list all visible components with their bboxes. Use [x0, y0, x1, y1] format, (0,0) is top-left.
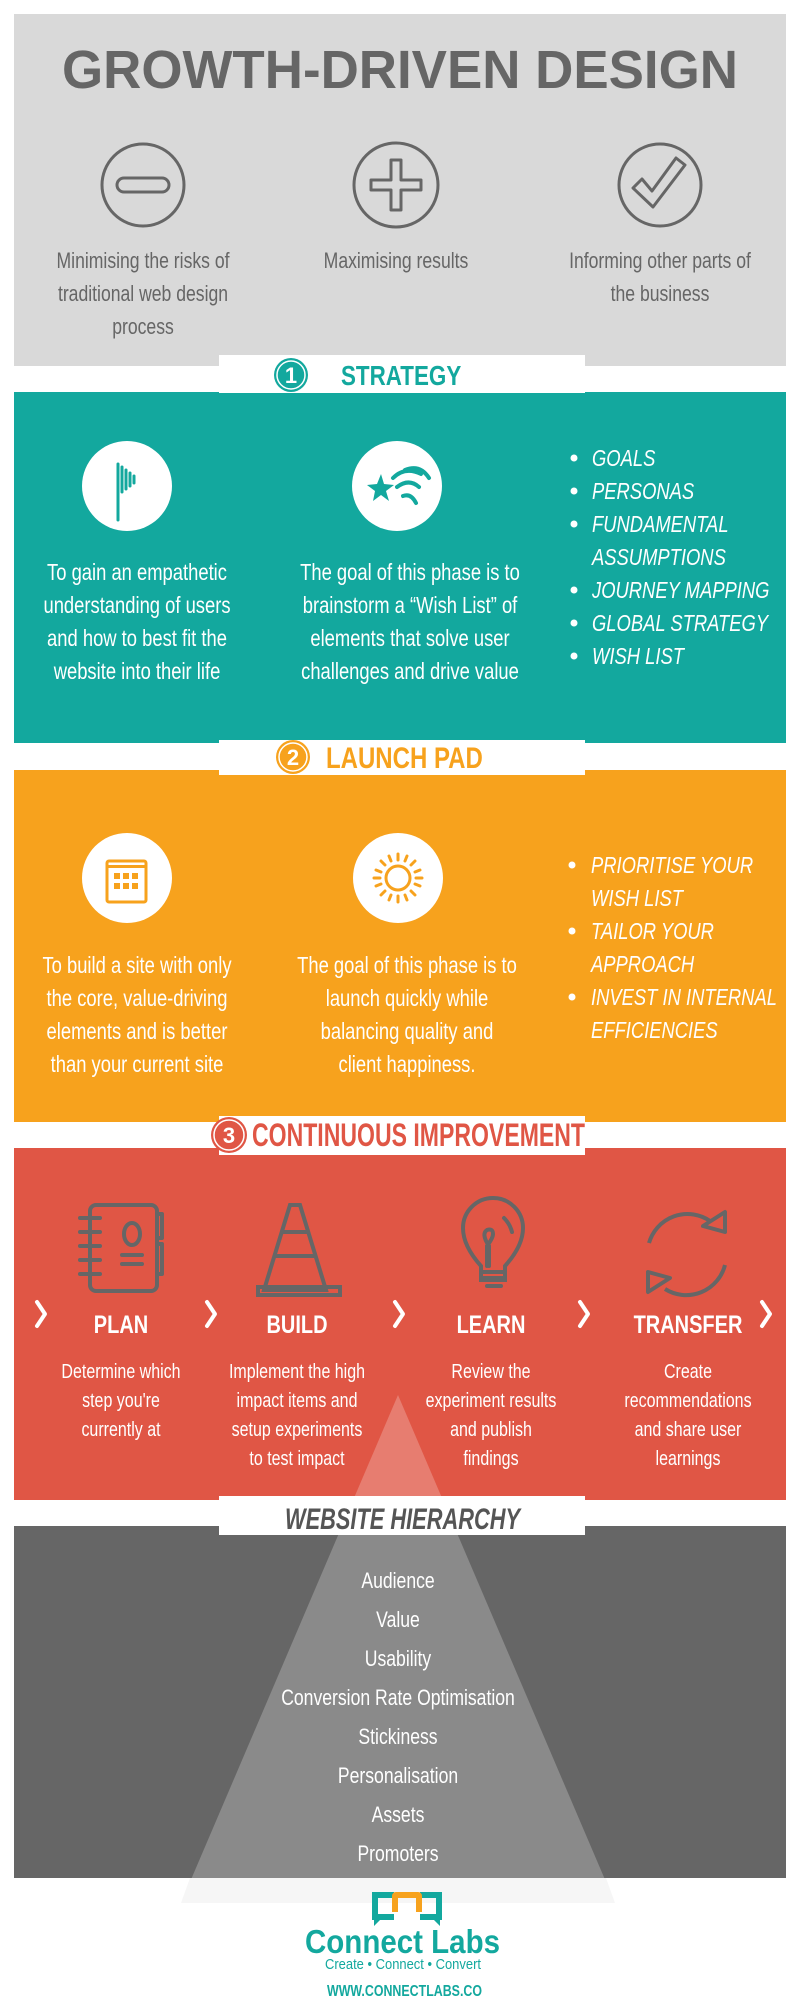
list: launch pad: WISH LIST	[591, 886, 684, 912]
text: launch left: To build a site with only	[42, 953, 232, 979]
heading: build: BUILD	[266, 1311, 328, 1339]
chevrons	[37, 1302, 770, 1326]
text: strategy left: website into their life	[53, 659, 220, 685]
panel: website hierarchy	[14, 1526, 786, 1878]
text: transfer	[624, 1360, 752, 1469]
text: launch middle: The goal of this phase is to	[297, 953, 517, 979]
heading: continuous improvement	[211, 1116, 585, 1155]
heading: strategy: 1	[285, 363, 297, 388]
hierarchy list: Conversion Rate Optimisation	[281, 1686, 515, 1711]
text: strategy left: To gain an empathetic	[47, 560, 227, 586]
icon: cone	[258, 1205, 340, 1295]
text: launch middle: balancing quality and	[321, 1019, 493, 1045]
text: learn: and publish	[450, 1418, 532, 1440]
text: launch left: the core, value-driving	[47, 986, 227, 1012]
text: transfer: Create	[664, 1360, 712, 1382]
text: strategy left	[43, 560, 231, 685]
text: launch middle: client happiness.	[339, 1052, 475, 1078]
text: plan: Determine which	[61, 1360, 181, 1382]
list: strategy: GLOBAL STRATEGY	[592, 611, 770, 637]
logo: connect labs	[305, 1892, 500, 2000]
logo: connect labs: WWW.CONNECTLABS.CO	[327, 1983, 482, 2000]
text: strategy middle: elements that solve user	[310, 626, 510, 652]
text: strategy middle: The goal of this phase is to	[300, 560, 520, 586]
text: learn	[426, 1360, 556, 1469]
text: strategy left: and how to best fit the	[47, 626, 227, 652]
icon: cycle arrows	[648, 1212, 725, 1295]
list: launch pad: EFFICIENCIES	[591, 1018, 718, 1044]
list: strategy: ASSUMPTIONS	[590, 545, 726, 571]
text: minimising	[57, 249, 230, 340]
text: informing: the business	[611, 282, 709, 307]
text: transfer: learnings	[656, 1447, 720, 1469]
icon: sun	[353, 833, 443, 923]
text: build: to test impact	[249, 1447, 345, 1469]
text: strategy middle	[300, 560, 520, 685]
text: launch left: than your current site	[51, 1052, 223, 1078]
list: launch pad: TAILOR YOUR	[591, 919, 714, 945]
pyramid	[181, 1395, 615, 1903]
icon: check	[619, 144, 701, 226]
heading: strategy: STRATEGY	[341, 361, 461, 392]
icon: calendar	[82, 833, 172, 923]
text: launch left	[42, 953, 232, 1078]
icon: flag	[82, 441, 172, 531]
text: informing: Informing other parts of	[569, 249, 751, 274]
heading: continuous improvement: 3	[223, 1123, 235, 1148]
hierarchy list: Assets	[372, 1803, 424, 1828]
list: strategy: PERSONAS	[592, 479, 694, 505]
list: launch pad: INVEST IN INTERNAL	[591, 985, 777, 1011]
text: learn: experiment results	[426, 1389, 556, 1411]
panel: strategy	[14, 392, 786, 743]
heading: strategy	[219, 355, 585, 393]
text: strategy middle: brainstorm a “Wish List” of	[303, 593, 517, 619]
heading: plan: PLAN	[94, 1311, 148, 1339]
text: minimising: traditional web design	[58, 282, 228, 307]
panel: launch pad	[14, 770, 786, 1122]
text: launch left: elements and is better	[47, 1019, 228, 1045]
text: launch middle: launch quickly while	[326, 986, 488, 1012]
logo: connect labs: Connect Labs	[305, 1923, 500, 1960]
heading: learn: LEARN	[457, 1311, 525, 1339]
text: build: setup experiments	[232, 1418, 362, 1440]
list: launch pad: APPROACH	[589, 952, 695, 978]
heading: launch pad: 2	[287, 745, 299, 770]
list: strategy: WISH LIST	[592, 644, 685, 670]
heading: launch pad	[219, 740, 585, 775]
text: maximising: Maximising results	[324, 249, 468, 274]
icon: plus	[354, 143, 438, 227]
text: transfer: and share user	[635, 1418, 741, 1440]
icon: minus	[102, 144, 184, 226]
text: build: impact items and	[237, 1389, 357, 1411]
list: strategy: JOURNEY MAPPING	[591, 578, 769, 604]
list: strategy	[570, 446, 770, 670]
icon: shooting star	[352, 441, 442, 531]
text: plan	[61, 1360, 181, 1440]
text: strategy middle: challenges and drive value	[301, 659, 519, 685]
hierarchy list	[281, 1569, 515, 1867]
text: build	[229, 1360, 365, 1469]
text: launch middle	[297, 953, 517, 1078]
text: learn: Review the	[451, 1360, 531, 1382]
title: GROWTH-DRIVEN DESIGN	[62, 40, 738, 100]
hierarchy list: Stickiness	[358, 1725, 438, 1750]
text: plan: currently at	[81, 1418, 161, 1440]
icon: logo bubbles	[372, 1892, 442, 1926]
heading: transfer: TRANSFER	[634, 1311, 742, 1339]
hierarchy list: Value	[376, 1608, 420, 1633]
list: launch pad	[568, 853, 777, 1044]
logo: connect labs: Create • Connect • Convert	[325, 1956, 482, 1973]
heading: website hierarchy	[219, 1496, 585, 1536]
icon: bulb	[463, 1198, 523, 1286]
list: launch pad: PRIORITISE YOUR	[591, 853, 753, 879]
list: strategy: GOALS	[592, 446, 655, 472]
hierarchy list: Audience	[361, 1569, 435, 1594]
text: strategy left: understanding of users	[43, 593, 231, 619]
text: minimising: Minimising the risks of	[57, 249, 230, 274]
icon: notebook	[80, 1205, 162, 1291]
text: build: Implement the high	[229, 1360, 365, 1382]
list: strategy: FUNDAMENTAL	[592, 512, 729, 538]
text: informing	[569, 249, 751, 307]
hierarchy list: Promoters	[357, 1842, 439, 1867]
heading: continuous improvement: CONTINUOUS IMPROVEMENT	[252, 1117, 585, 1153]
text: transfer: recommendations	[624, 1389, 752, 1411]
hierarchy list: Usability	[365, 1647, 431, 1672]
hierarchy list: Personalisation	[338, 1764, 458, 1789]
text: learn: findings	[463, 1447, 519, 1469]
heading: launch pad: LAUNCH PAD	[326, 740, 483, 775]
panel: header	[14, 14, 786, 366]
text: minimising: process	[112, 315, 174, 340]
heading: website hierarchy: WEBSITE HIERARCHY	[285, 1503, 522, 1536]
text: plan: step you're	[82, 1389, 160, 1411]
panel: continuous improvement	[14, 1148, 786, 1500]
